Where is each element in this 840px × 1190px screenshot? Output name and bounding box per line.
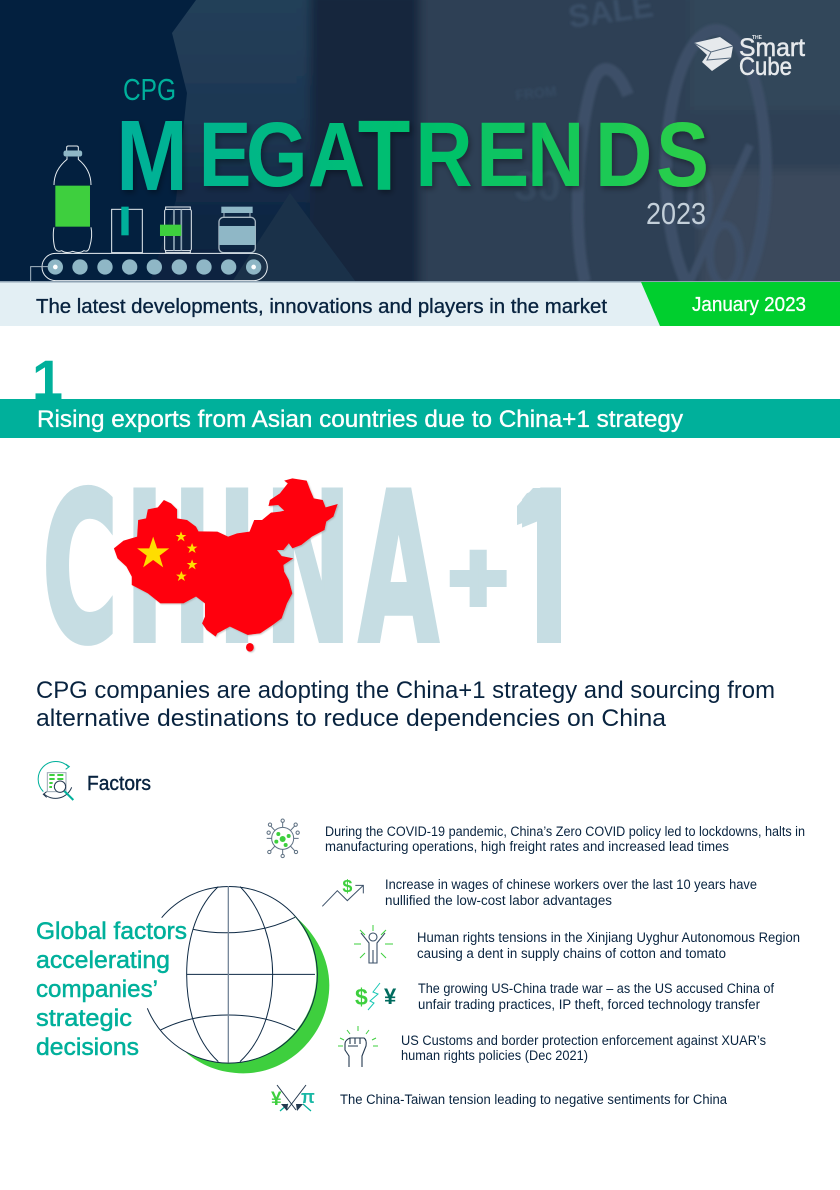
factor text: human rights: causing a dent in supply chains of cotton and tomato	[417, 946, 726, 961]
logo: The Smart Cube: Cube	[739, 53, 792, 81]
icon: jar	[219, 207, 255, 253]
section heading bar	[0, 399, 840, 438]
heading: global factors	[36, 918, 187, 1061]
icon: rising wages: $	[342, 876, 352, 896]
globe illustration	[147, 886, 329, 1073]
big text: CHINA+1: +	[446, 532, 511, 622]
title: MEGATRENDS	[116, 100, 709, 211]
factor text: wages: Increase in wages of chinese workers over the last 10 years have	[385, 877, 757, 892]
factor text: covid	[325, 824, 805, 854]
icon: flag stars	[137, 531, 197, 581]
summary text: CPG companies are adopting the China+1 strategy and sourcing from	[36, 677, 775, 704]
summary text	[36, 677, 775, 732]
factor text: china-taiwan: The China-Taiwan tension leading to negative sentiments for China	[340, 1092, 727, 1107]
icon: raised fist	[338, 1026, 378, 1067]
title: MEGATRENDS: M	[116, 100, 188, 211]
heading: global factors: companies’	[36, 976, 158, 1003]
heading: global factors: Global factors	[36, 918, 187, 945]
title: MEGATRENDS: T	[358, 100, 410, 211]
logo: The Smart Cube: THE	[752, 35, 763, 41]
icon: carton box	[112, 207, 142, 253]
title: MEGATRENDS: E	[476, 103, 529, 206]
heading: Factors: Factors	[87, 773, 151, 795]
title: MEGATRENDS: A	[308, 103, 365, 206]
icon: trade war: ¥	[384, 984, 397, 1009]
header banner	[0, 0, 840, 310]
title: MEGATRENDS: S	[656, 103, 709, 206]
title: MEGATRENDS: R	[415, 103, 473, 206]
conveyor belt	[31, 253, 267, 282]
header banner: FROM	[515, 83, 557, 103]
icon: currency tension	[271, 1085, 315, 1111]
icon: trade war	[355, 983, 397, 1010]
factor text: human rights: Human rights tensions in the Xinjiang Uyghur Autonomous Region	[417, 930, 800, 945]
factor text: human rights	[417, 930, 800, 961]
title: MEGATRENDS: D	[595, 103, 652, 206]
heading: global factors: decisions	[36, 1034, 139, 1061]
icon: can	[160, 207, 191, 253]
header banner: 30	[514, 162, 561, 209]
factor text: trade war	[418, 981, 774, 1012]
title: MEGATRENDS: G	[246, 103, 308, 206]
icon: human rights	[354, 925, 393, 963]
factor text: wages	[385, 877, 757, 908]
icon: currency tension: ¥	[271, 1089, 282, 1110]
icon: rising wages	[322, 876, 363, 906]
title: MEGATRENDS: N	[527, 103, 584, 206]
title: year 2023: 2023	[646, 196, 706, 231]
tagline text: The latest developments, innovations and players in the market	[36, 296, 607, 318]
factor text: covid: manufacturing operations, high freight rates and increased lead times	[325, 839, 729, 854]
factor text: trade war: unfair trading practices, IP theft, forced technology transfer	[418, 997, 760, 1012]
big text: CHINA+1: CHINA	[42, 452, 438, 689]
icon: factors analysis	[38, 761, 73, 800]
section number 1: 1	[32, 348, 63, 411]
factor text: covid: During the COVID-19 pandemic, China’s Zero COVID policy led to lockdowns, halts in	[325, 824, 805, 839]
factor text: customs	[401, 1033, 766, 1063]
heading: global factors: accelerating	[36, 947, 170, 974]
heading: global factors: strategic	[36, 1005, 132, 1032]
factor text: wages: nullified the low-cost labor advantages	[385, 893, 612, 908]
icon: virus	[267, 819, 299, 858]
icon: bottle	[53, 146, 92, 253]
big text: CHINA+1: 1	[512, 452, 583, 689]
title: CPG: CPG	[123, 72, 176, 107]
title: MEGATRENDS: E	[199, 103, 251, 206]
date badge	[641, 282, 840, 326]
factor text: trade war: The growing US-China trade war – as the US accused China of	[418, 981, 774, 996]
map: China with flag	[114, 478, 338, 652]
summary text: alternative destinations to reduce dependencies on China	[36, 705, 667, 732]
factor text: customs: human rights policies (Dec 2021)	[401, 1048, 588, 1063]
section heading bar: Rising exports from Asian countries due to China+1 strategy	[37, 406, 683, 433]
icon: currency tension: π	[301, 1087, 315, 1107]
logo: The Smart Cube	[694, 34, 805, 81]
factor text: customs: US Customs and border protection enforcement against XUAR’s	[401, 1033, 766, 1048]
illustration: products on conveyor belt	[31, 146, 267, 282]
tagline band	[0, 281, 840, 326]
date badge: January 2023	[692, 294, 806, 316]
icon: trade war: $	[355, 984, 368, 1010]
logo: The Smart Cube: Smart	[739, 34, 805, 62]
